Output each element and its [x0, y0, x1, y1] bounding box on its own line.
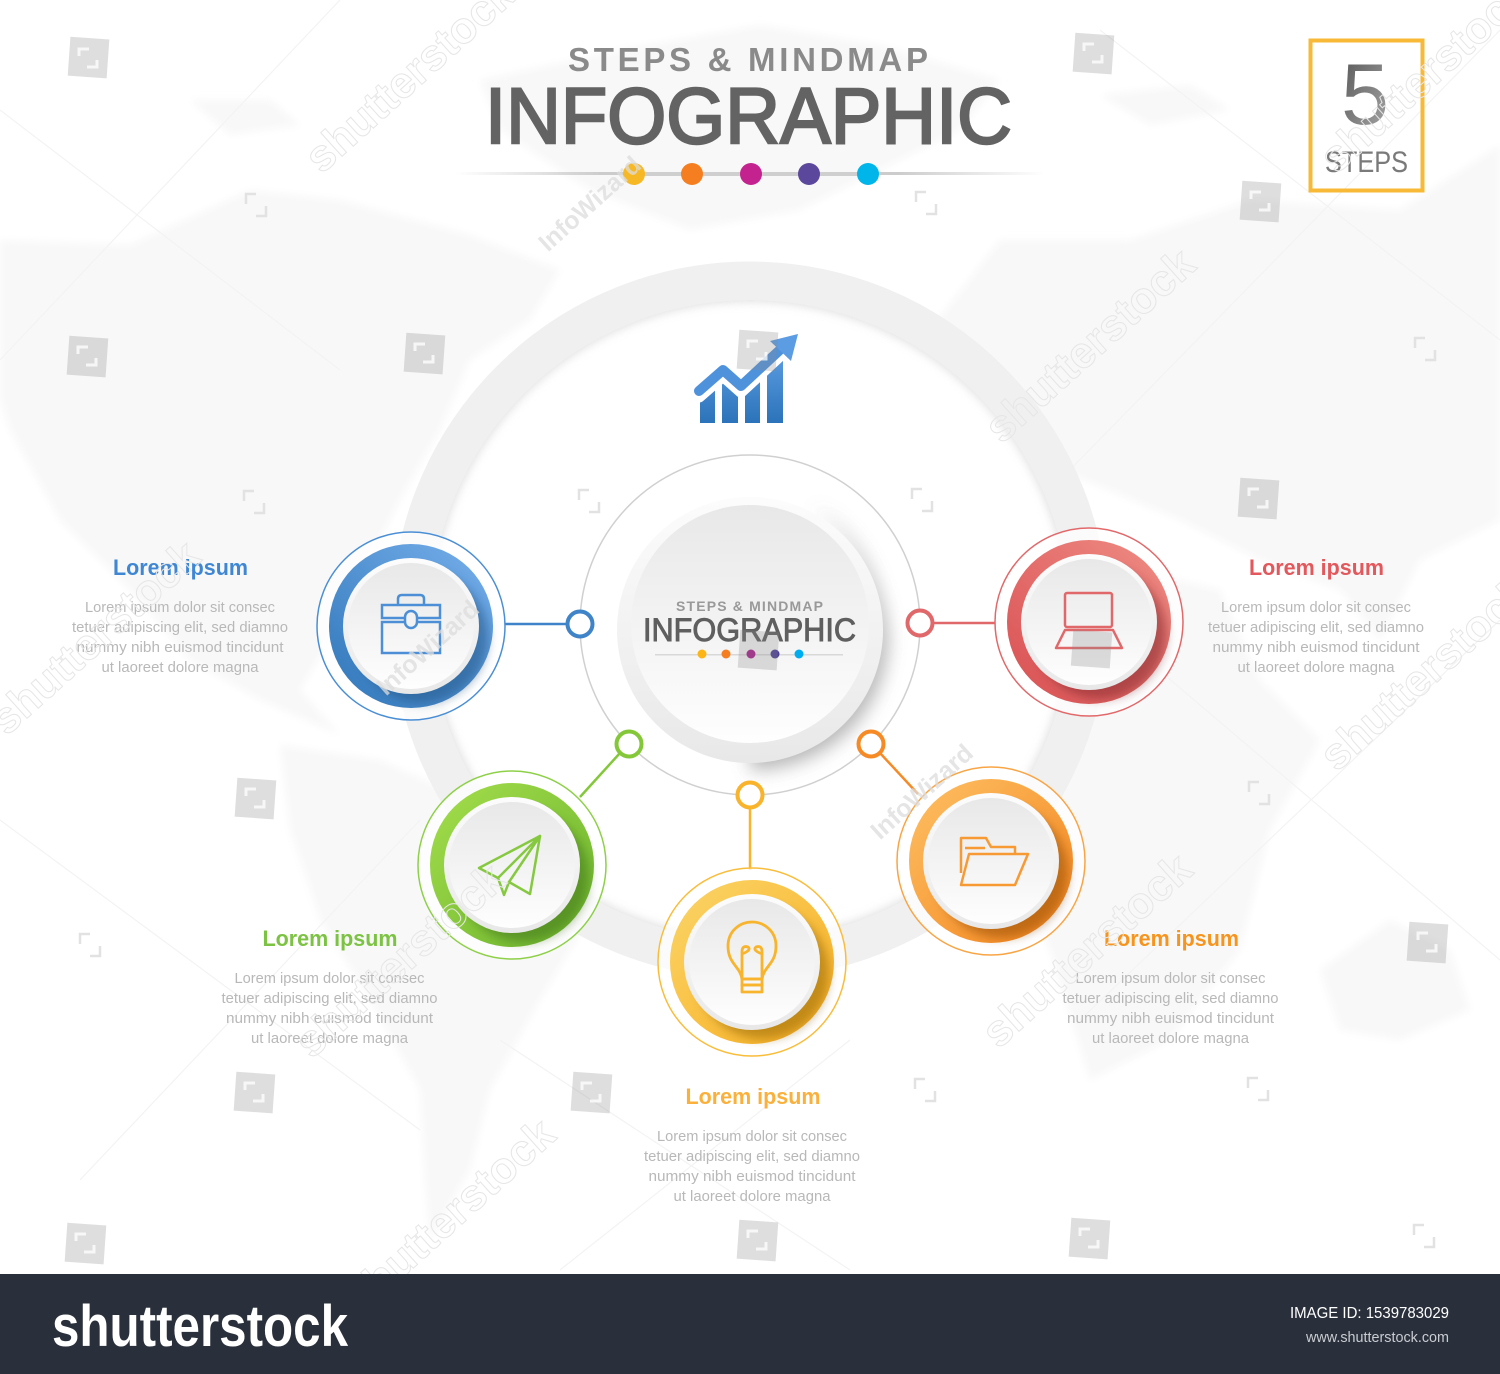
title divider with dots	[455, 163, 1045, 185]
text block: blue: Lorem ipsum	[113, 555, 248, 580]
text block: orange: Lorem ipsum	[1104, 926, 1239, 951]
text block: blue	[72, 555, 288, 676]
node: yellow light bulb	[658, 868, 846, 1056]
connector: red	[908, 610, 995, 636]
text block: green: ut laoreet dolore magna	[251, 1030, 409, 1047]
text block: yellow: ut laoreet dolore magna	[674, 1188, 831, 1205]
watermark overlays: shutterstock	[976, 239, 1205, 452]
badge: 5 steps: 5	[1341, 47, 1389, 143]
center title: INFOGRAPHIC	[643, 612, 856, 648]
icon: light bulb	[728, 922, 776, 992]
connector: blue	[505, 612, 592, 636]
connector: yellow	[738, 782, 762, 870]
text block: green: nummy nibh euismod tincidunt	[226, 1010, 434, 1027]
watermark overlays: InfoWizard	[865, 739, 979, 845]
watermark overlays: InfoWizard	[371, 595, 485, 701]
icon: briefcase	[382, 595, 440, 653]
footer bar	[0, 1274, 1500, 1374]
text block: blue: Lorem ipsum dolor sit consec	[85, 599, 275, 616]
badge: 5 steps: STEPS	[1325, 146, 1408, 179]
title line 2: INFOGRAPHIC	[485, 71, 1012, 160]
node: green paper plane	[418, 771, 606, 959]
text block: red: Lorem ipsum dolor sit consec	[1221, 599, 1411, 616]
icon: paper plane	[479, 836, 540, 895]
footer url: www.shutterstock.com	[1305, 1329, 1449, 1346]
text block: red: tetuer adipiscing elit, sed diamno	[1208, 619, 1424, 636]
node: red laptop	[995, 528, 1183, 716]
footer image id: IMAGE ID: 1539783029	[1290, 1305, 1449, 1322]
footer logo: shutterstock	[52, 1294, 349, 1359]
text block: green: tetuer adipiscing elit, sed diamno	[222, 990, 438, 1007]
text block: red: ut laoreet dolore magna	[1238, 659, 1395, 676]
watermark overlays: shutterstock	[973, 844, 1202, 1057]
text block: yellow: Lorem ipsum	[686, 1084, 820, 1109]
title	[455, 41, 1045, 185]
text block: red: nummy nibh euismod tincidunt	[1212, 639, 1420, 656]
text block: orange: Lorem ipsum dolor sit consec	[1076, 970, 1266, 987]
node: orange folder	[897, 767, 1085, 955]
node: blue briefcase	[317, 532, 505, 720]
badge: 5 steps	[1310, 40, 1422, 190]
text block: yellow: nummy nibh euismod tincidunt	[648, 1168, 856, 1185]
icon: growth chart	[699, 334, 798, 423]
text block: red: Lorem ipsum	[1249, 555, 1384, 580]
text block: yellow: Lorem ipsum dolor sit consec	[657, 1128, 847, 1145]
text block: yellow: tetuer adipiscing elit, sed diamno	[644, 1148, 860, 1165]
connector: green	[580, 732, 642, 797]
text block: orange: tetuer adipiscing elit, sed diamno	[1062, 990, 1278, 1007]
text block: green: Lorem ipsum	[262, 926, 398, 951]
center thin circle	[580, 455, 920, 795]
icon: laptop	[1056, 593, 1122, 648]
text block: yellow	[644, 1084, 860, 1205]
text block: orange: ut laoreet dolore magna	[1092, 1030, 1250, 1047]
watermark overlays: shutterstock	[286, 854, 515, 1067]
center title	[643, 598, 856, 658]
text block: orange: nummy nibh euismod tincidunt	[1067, 1010, 1275, 1027]
connector: orange	[858, 732, 918, 794]
text block: blue: tetuer adipiscing elit, sed diamno	[72, 619, 288, 636]
text block: orange	[1062, 926, 1278, 1047]
center title: STEPS & MINDMAP	[676, 598, 823, 614]
text block: blue: nummy nibh euismod tincidunt	[76, 639, 284, 656]
watermark overlays: shutterstock	[336, 1109, 565, 1322]
icon: folder	[961, 838, 1028, 885]
title line 1: STEPS & MINDMAP	[568, 41, 928, 78]
text block: green: Lorem ipsum dolor sit consec	[234, 970, 425, 987]
watermark overlays: InfoWizard	[533, 151, 647, 257]
big outer ring	[411, 281, 1089, 959]
text block: red	[1208, 555, 1424, 676]
text block: blue: ut laoreet dolore magna	[102, 659, 259, 676]
center disc	[617, 497, 888, 770]
text block: green	[222, 926, 438, 1047]
